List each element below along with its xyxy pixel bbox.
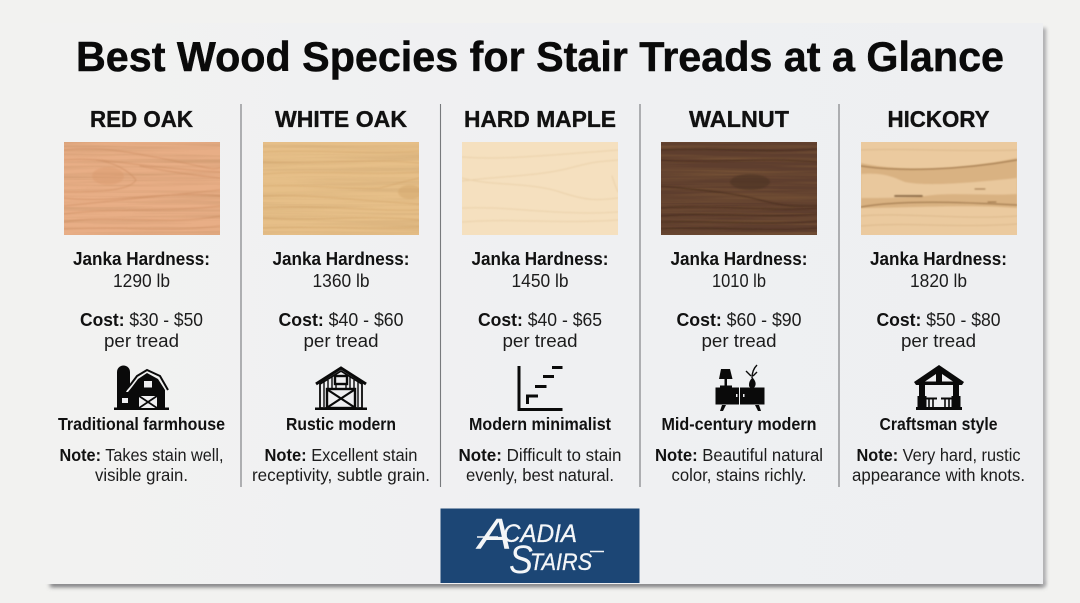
panel: walnut: per tread: [702, 331, 776, 351]
icon: mid-century sideboard with lamp and plant: [716, 365, 764, 411]
panel: hard maple: [458, 106, 622, 485]
panel: red oak: per tread: [104, 331, 179, 351]
heading: hard maple: HARD MAPLE: [464, 106, 616, 132]
note: white oak: Note: Excellent stain: [264, 445, 418, 465]
logo: Acadia Stairs: [440, 508, 640, 583]
style: craftsman style: Craftsman style: [880, 414, 998, 434]
note: hickory: Note: Very hard, rustic: [856, 445, 1021, 465]
swatch: hickory wood: [861, 142, 1017, 235]
style: mid-century modern: Mid-century modern: [662, 414, 816, 434]
panel: red oak: 1290 lb: [113, 271, 170, 291]
panel: hickory: appearance with knots.: [852, 465, 1025, 485]
note: hard maple: Note: Difficult to stain: [458, 445, 622, 465]
logo: Acadia Stairs: A: [475, 510, 512, 559]
swatch: hard maple wood: [462, 142, 618, 235]
cost: walnut: Cost: $60 - $90: [676, 310, 802, 330]
panel: white oak: receptivity, subtle grain.: [252, 465, 430, 485]
icon: barn with silo: [114, 366, 169, 410]
panel: red oak: [58, 106, 225, 485]
icon: craftsman pergola: [914, 365, 964, 410]
style: traditional farmhouse: Traditional farmhouse: [58, 414, 225, 434]
hardness: white oak: Janka Hardness:: [272, 249, 410, 269]
logo: Acadia Stairs: CADIA: [503, 520, 577, 548]
panel: red oak: visible grain.: [95, 465, 188, 485]
style: modern minimalist: Modern minimalist: [469, 414, 611, 434]
cost: white oak: Cost: $40 - $60: [278, 310, 404, 330]
swatch: red oak wood: [64, 142, 220, 235]
swatch: white oak wood: [263, 142, 422, 235]
hardness: red oak: Janka Hardness:: [73, 249, 210, 269]
panel: hard maple: evenly, best natural.: [466, 465, 614, 485]
style: rustic modern: Rustic modern: [286, 414, 396, 434]
cost: hickory: Cost: $50 - $80: [876, 310, 1000, 330]
cost: red oak: Cost: $30 - $50: [80, 310, 203, 330]
panel: white oak: per tread: [304, 331, 378, 351]
note: walnut: Note: Beautiful natural: [655, 445, 823, 465]
panel: walnut: [655, 106, 823, 485]
heading: walnut: WALNUT: [689, 106, 790, 132]
hardness: hard maple: Janka Hardness:: [472, 249, 608, 269]
hardness: hickory: Janka Hardness:: [870, 249, 1007, 269]
panel: hard maple: per tread: [502, 331, 578, 351]
panel: walnut: color, stains richly.: [672, 465, 806, 485]
note: red oak: Note: Takes stain well,: [60, 445, 224, 465]
column dividers: [241, 104, 839, 487]
panel: white oak: 1360 lb: [312, 271, 370, 291]
panel: hickory: 1820 lb: [910, 271, 967, 291]
panel: white oak: [252, 106, 430, 485]
heading: red oak: RED OAK: [90, 106, 193, 132]
logo: Acadia Stairs: S: [509, 538, 533, 582]
hardness: walnut: Janka Hardness:: [670, 249, 808, 269]
panel: walnut: 1010 lb: [712, 271, 766, 291]
icon: rustic barn: [315, 368, 367, 410]
panel: hard maple: 1450 lb: [512, 271, 568, 291]
cost: hard maple: Cost: $40 - $65: [478, 310, 602, 330]
panel: hickory: [852, 106, 1025, 485]
title: Best Wood Species for Stair Treads at a Glance: [76, 33, 1004, 80]
heading: white oak: WHITE OAK: [275, 106, 407, 132]
icon: minimalist stairs: [518, 366, 562, 411]
swatch: walnut wood: [661, 142, 817, 235]
logo: Acadia Stairs: TAIRS: [530, 549, 592, 576]
heading: hickory: HICKORY: [888, 106, 990, 132]
panel: hickory: per tread: [901, 331, 976, 351]
